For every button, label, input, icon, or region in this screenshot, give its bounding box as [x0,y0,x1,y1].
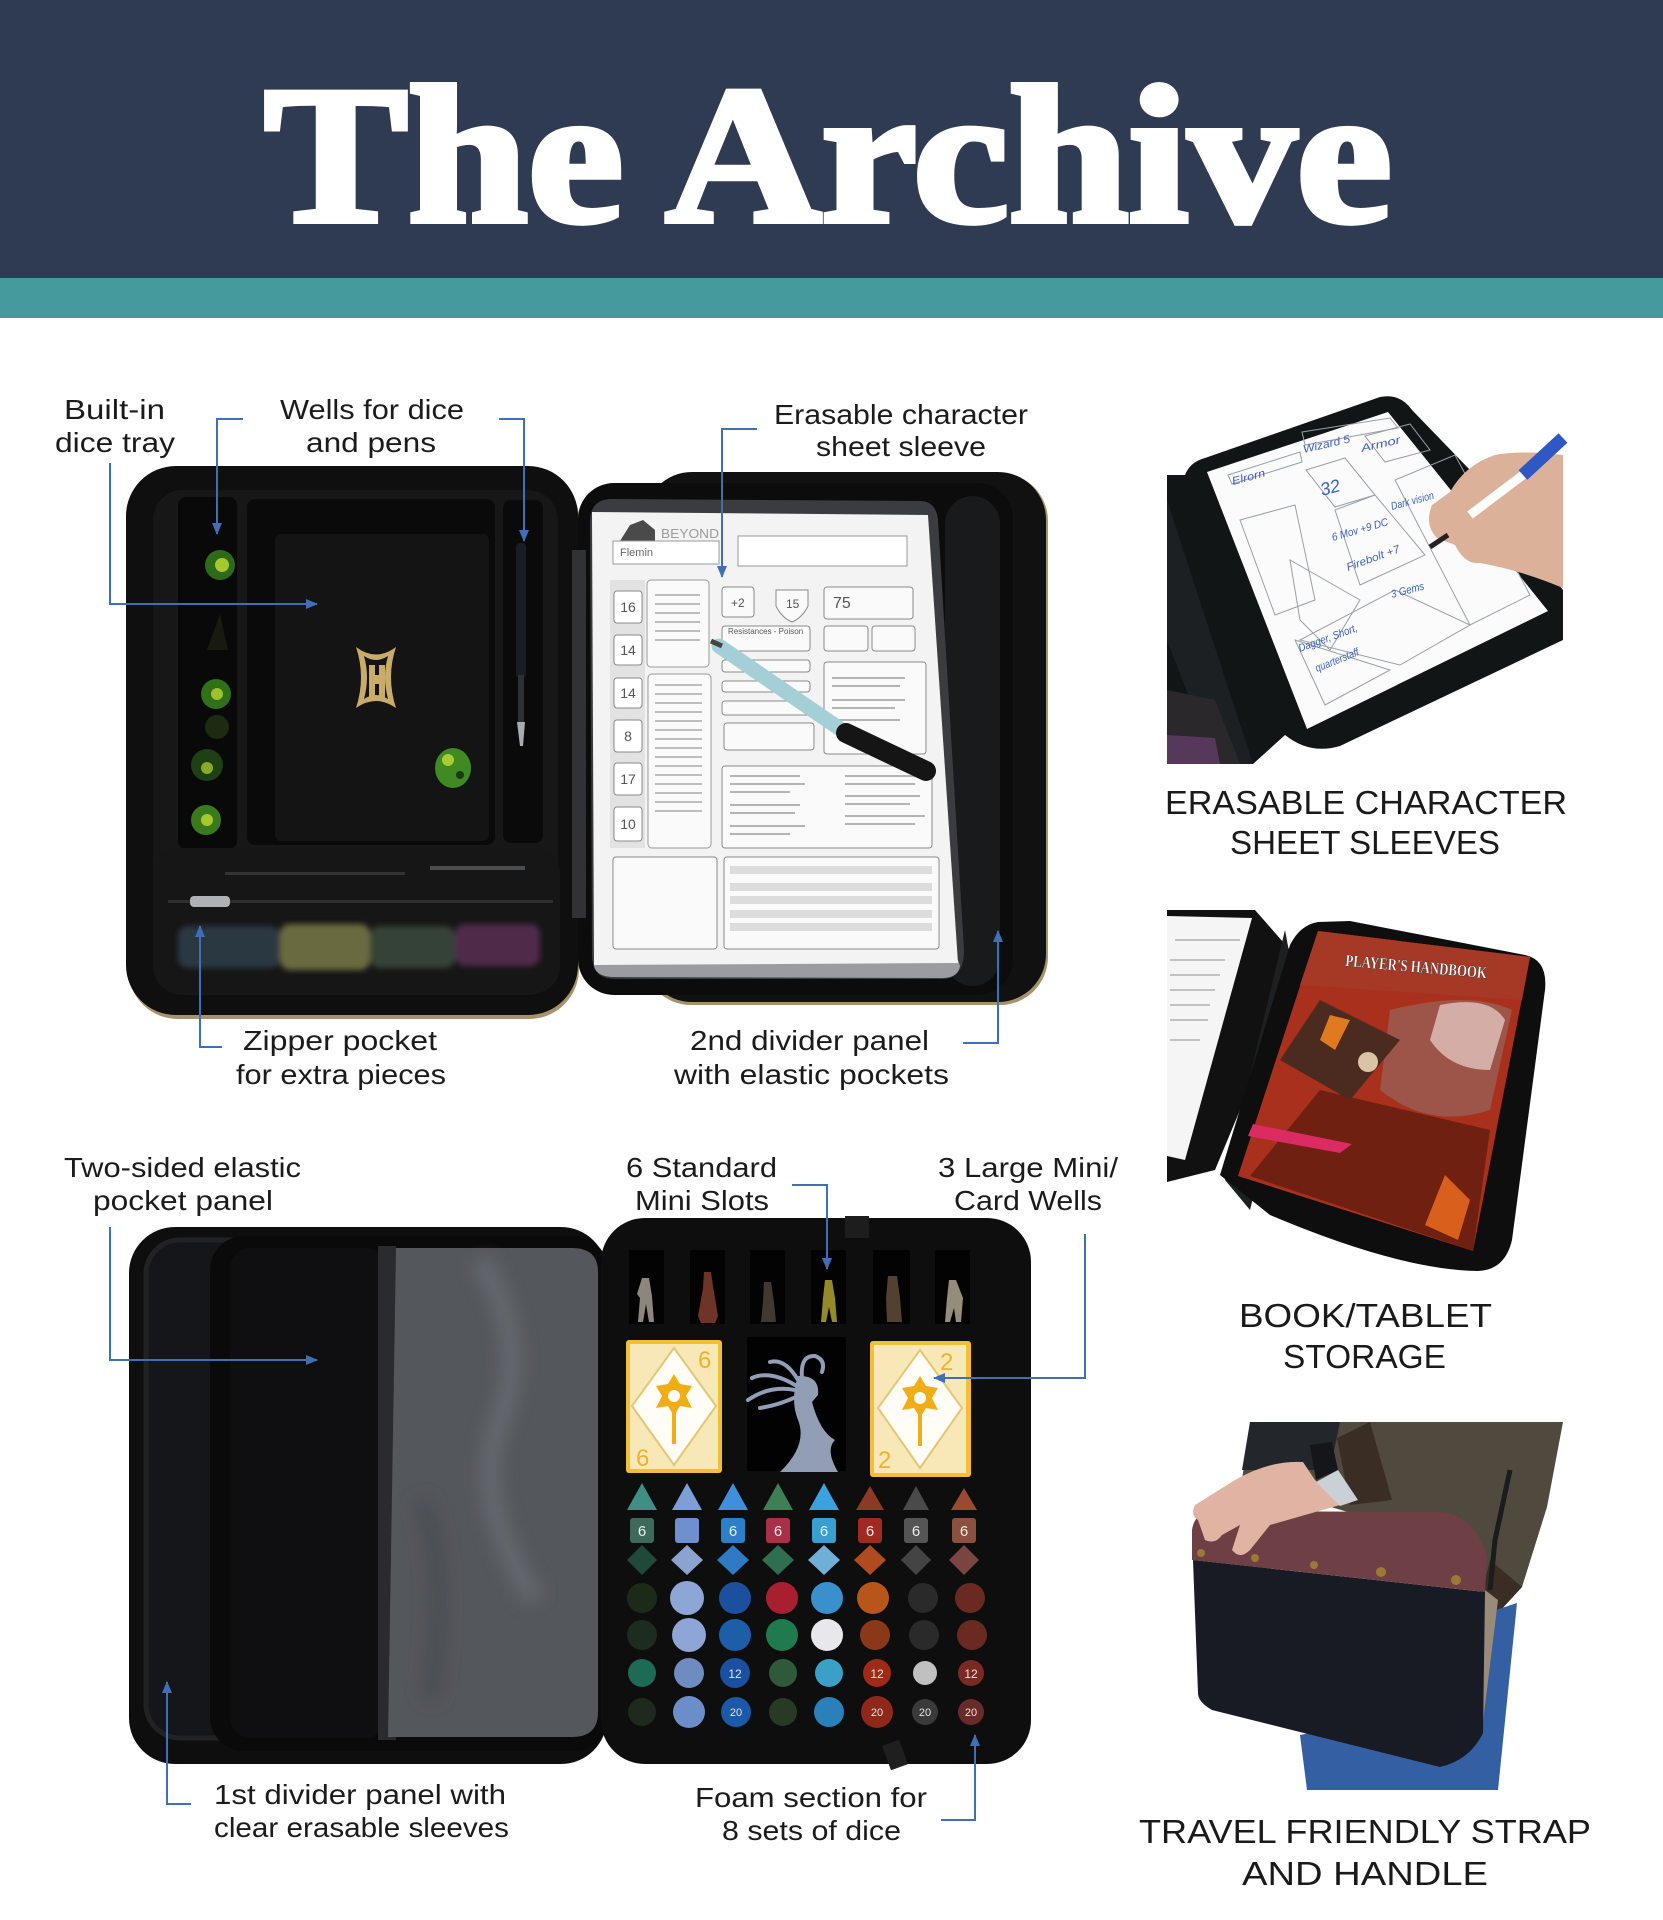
label: 6 standard mini slots: 6 Standard [626,1152,777,1183]
label: 2nd divider panel [673,1025,949,1090]
label: 3 large mini card wells: Card Wells [954,1185,1102,1216]
handwriting: 3 Gems [1390,580,1426,601]
label: first divider panel [214,1779,509,1843]
caption: travel strap [1139,1813,1591,1892]
mini slots [629,1250,970,1324]
hinge [1167,500,1253,764]
hinge [1225,930,1300,1210]
hand [1193,1462,1340,1555]
dice: d12 row [628,1658,984,1688]
case shell [1167,396,1563,764]
caption: erasable sleeves [1165,784,1567,861]
handwriting: 6 Mov +9 DC [1331,516,1390,544]
miniatures [637,1272,963,1323]
arrow: first divider [167,1682,191,1804]
dice: d12 row: 12 [870,1667,884,1681]
handwriting: quarterstaff [1314,646,1361,675]
label: foam section [695,1782,927,1846]
sheet header: Flemin [620,547,653,559]
pen [516,543,526,746]
arrow: elastic panel [110,1227,317,1360]
first divider panel [146,1240,346,1738]
label: 6 standard mini slots: Mini Slots [635,1185,769,1216]
skills boxes [647,580,711,848]
ability column [610,580,645,848]
card: 6: 6 [636,1445,649,1472]
sheet text lines [730,678,925,834]
label: 3 large mini card wells: 3 Large Mini/ [938,1152,1118,1183]
dice in well [191,550,235,835]
handwriting: Dagger, Short, [1297,622,1359,655]
dark jacket panel [1242,1422,1340,1470]
dice: d6 row: 6 [960,1523,968,1540]
label: erasable character sheet sleeve: sheet sleeve [816,431,986,462]
arrow: pen well [499,419,524,541]
cover art [1250,931,1530,1251]
arrow: mini slots [792,1185,827,1269]
label: wells for dice and pens: Wells for dice [280,394,464,425]
stat values: Resistances - Poison [728,627,803,636]
label: foam section: Foam section for [695,1782,927,1813]
dice: d6 row: 6 [912,1523,920,1540]
label: zipper pocket: for extra pieces [236,1059,446,1090]
dice: d4 row [627,1483,977,1510]
label: built-in dice tray: Built-in [64,394,165,425]
case shell [1220,921,1545,1271]
label: foam section: 8 sets of dice [722,1815,901,1846]
label: 3 large mini card wells [938,1152,1118,1216]
stat boxes [613,587,939,949]
label: erasable character sheet sleeve: Erasable character [774,399,1028,430]
handwriting: 32 [1318,475,1342,500]
sleeve lower reflection [594,960,960,978]
dice: d20 row: 20 [965,1707,977,1719]
dice: d% row [627,1618,987,1652]
sheet header: BEYOND [661,526,719,541]
label: built-in dice tray [55,394,175,458]
photo: book storage [1167,910,1545,1271]
label: first divider panel: clear erasable sleeves [214,1812,509,1843]
card: 2 [870,1341,971,1477]
caption: book storage: STORAGE [1283,1338,1446,1375]
character sheet [592,512,958,965]
label: two-sided elastic pocket panel: pocket panel [93,1185,273,1216]
bag body [1193,1560,1485,1767]
pink stripe [1248,1124,1352,1153]
hand [1429,452,1563,588]
mesh pocket [1167,690,1240,764]
card wells [626,1337,971,1477]
title: The Archive [264,47,1392,264]
dice: d12 row: 12 [964,1667,978,1681]
dice: d6 row: 6 [729,1523,737,1540]
cuff [1337,1422,1392,1505]
arrow: foam section [941,1735,975,1820]
pen well [503,500,543,843]
arrow: dice tray [110,463,317,604]
paper [592,512,958,965]
label: 2nd divider panel: 2nd divider panel [690,1025,929,1056]
sheet lines [1170,940,1240,1040]
caption: erasable sleeves: SHEET SLEEVES [1230,824,1500,861]
photo: open case, foam side [129,1216,1031,1770]
zipper pocket [153,848,560,993]
dice: d6 row: 6 [638,1523,646,1540]
clear sleeve [590,499,964,979]
label: 6 standard mini slots [626,1152,777,1216]
label: zipper pocket: Zipper pocket [243,1025,437,1056]
handwriting: Wizard 5 [1302,433,1352,456]
caption: book storage [1239,1297,1492,1375]
ability column: 14 [620,642,636,658]
dice: d6 row: 6 [774,1523,782,1540]
book title: PLAYER'S HANDBOOK [1345,951,1488,982]
dice: d6 row: 6 [866,1523,874,1540]
stat values: +2 [731,596,745,610]
dice well [178,497,237,849]
card: 2: 2 [878,1447,891,1474]
center tray [247,499,495,845]
dice: d8 row [627,1545,979,1575]
label: erasable character sheet sleeve [774,399,1028,462]
jeans [1300,1603,1517,1790]
arrow: card wells [934,1234,1085,1378]
photo: travel strap and handle [1192,1422,1563,1790]
card: 2: 2 [940,1349,953,1376]
label: wells for dice and pens: and pens [306,427,436,458]
left sleeve [1167,910,1290,1182]
stat values: 15 [786,597,800,611]
arrow: zipper pocket [200,926,222,1047]
sheet header [613,520,907,566]
label: two-sided elastic pocket panel [64,1152,301,1216]
ability column: 14 [620,685,636,701]
dice: d6 row [630,1518,976,1543]
marker [711,641,926,771]
mesh pocket dice [1167,735,1220,764]
label: zipper pocket [236,1025,446,1090]
handwriting: Dark vision [1390,490,1435,513]
dice: d12 row: 12 [728,1667,742,1681]
ability column: 10 [620,816,636,832]
left half shell [129,1227,607,1764]
arrow: sheet sleeve [722,429,757,577]
icon: gold logo [356,647,396,708]
label: two-sided elastic pocket panel: Two-sided elastic [64,1152,301,1183]
pen [1430,438,1563,547]
caption: travel strap: TRAVEL FRIENDLY STRAP [1139,1813,1591,1850]
large miniature [748,1356,838,1472]
stat values: 75 [833,595,851,612]
arrow: dice well [217,419,243,534]
bag side [1450,1590,1498,1765]
front pocket panel [210,1236,608,1751]
label: built-in dice tray: dice tray [55,427,175,458]
jacket [1242,1422,1563,1613]
ability column: 16 [620,599,636,615]
loose die [435,748,471,788]
icon: gold logo tower [369,665,385,698]
right half foam [601,1216,1031,1770]
card: 6: 6 [698,1347,711,1374]
stat values [728,595,851,636]
caption: erasable sleeves: ERASABLE CHARACTER [1165,784,1567,821]
rivets [1197,1549,1461,1585]
dice: d20 row [628,1696,984,1728]
photo: open case, dice tray side [126,466,1048,1019]
left half shell [126,466,579,1019]
caption: travel strap: AND HANDLE [1242,1855,1488,1892]
lower sweater [1480,1560,1522,1613]
dice: d10 row [627,1581,985,1615]
dice: d20 row: 20 [871,1707,883,1719]
watch [1310,1442,1358,1506]
strap [1490,1470,1510,1590]
dice: d20 row: 20 [919,1707,931,1719]
handwriting: Firebolt +7 [1345,543,1403,574]
handwriting: Armor [1359,434,1403,455]
book cover [1238,931,1530,1251]
right half back panel [643,472,1048,1005]
right half inner panel [572,483,1013,995]
card: 6 [626,1340,722,1473]
sheet boxes [1228,418,1530,705]
caption: book storage: BOOK/TABLET [1239,1297,1492,1334]
sheet [1207,412,1548,729]
handwriting [1231,433,1435,675]
sheet on left sleeve [1167,916,1252,1160]
label: first divider panel: 1st divider panel with [214,1779,506,1810]
dice: d6 row: 6 [820,1523,828,1540]
photo: erasable sleeve in use [1167,396,1563,764]
header banner [0,0,1663,318]
handwriting: Elrorn [1231,468,1267,488]
bag flap [1192,1511,1487,1592]
ability column: 8 [624,728,632,744]
arrow: second divider [963,931,998,1043]
label: 2nd divider panel: with elastic pockets [673,1059,949,1090]
dice: d20 row: 20 [730,1707,742,1719]
label: wells for dice and pens [280,394,464,458]
ability column: 17 [620,771,636,787]
weapon table [730,866,932,931]
